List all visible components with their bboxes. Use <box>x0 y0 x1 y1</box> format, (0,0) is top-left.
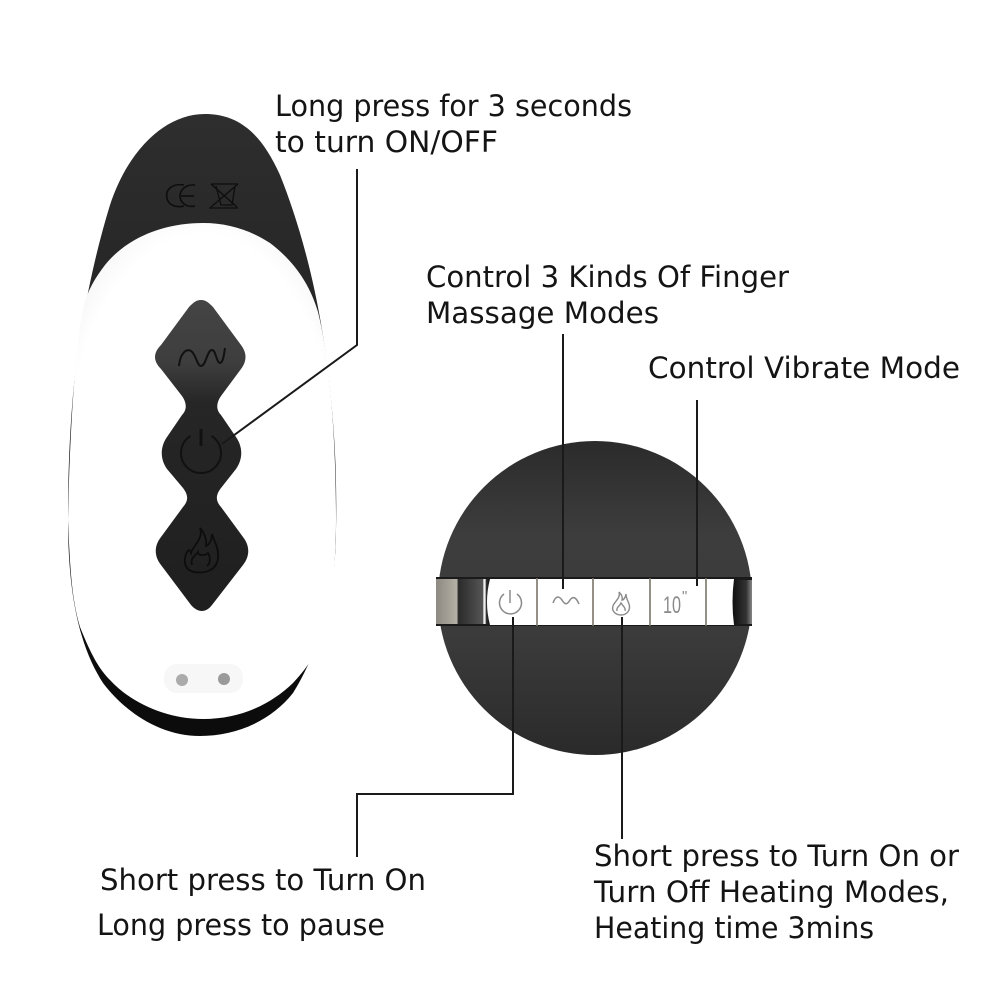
label: short press: Short press to Turn On <box>100 863 426 897</box>
label: power on/off <box>275 89 632 159</box>
metal ends <box>436 579 488 624</box>
key label: seconds mark: " <box>682 588 687 605</box>
device black shell <box>68 114 336 736</box>
key separators <box>537 578 706 626</box>
key icon: wave <box>553 597 579 604</box>
recycling mark <box>209 184 238 208</box>
label: heating: Heating time 3mins <box>594 911 874 945</box>
base ball <box>438 441 752 755</box>
icon: power <box>181 429 221 473</box>
label: short press: Long press to pause <box>97 908 385 942</box>
device: front view <box>68 114 336 736</box>
device white body <box>68 223 336 719</box>
button keys <box>487 579 734 625</box>
device: round base view <box>436 441 752 755</box>
charging contacts <box>164 664 243 693</box>
label: short press <box>97 863 426 942</box>
key label: 10 seconds: 10 <box>663 592 681 619</box>
label: vibrate mode: Control Vibrate Mode <box>648 351 960 385</box>
key icon: flame <box>613 592 630 615</box>
leader lines <box>222 169 697 857</box>
label: heating: Short press to Turn On or <box>594 839 959 873</box>
label: power on/off: Long press for 3 seconds <box>275 89 632 123</box>
label: finger massage modes: Massage Modes <box>426 296 659 330</box>
label: power on/off: to turn ON/OFF <box>275 125 498 159</box>
label: finger massage modes <box>426 260 789 330</box>
control button strip <box>155 300 248 611</box>
label: heating: Turn Off Heating Modes, <box>593 875 949 909</box>
label: heating <box>593 839 959 945</box>
CE mark <box>167 185 195 207</box>
icon: flame <box>185 528 218 572</box>
control band <box>436 577 752 626</box>
label: finger massage modes: Control 3 Kinds Of Finger <box>426 260 789 294</box>
icon: wave <box>179 348 225 366</box>
key icon: power <box>500 590 522 614</box>
